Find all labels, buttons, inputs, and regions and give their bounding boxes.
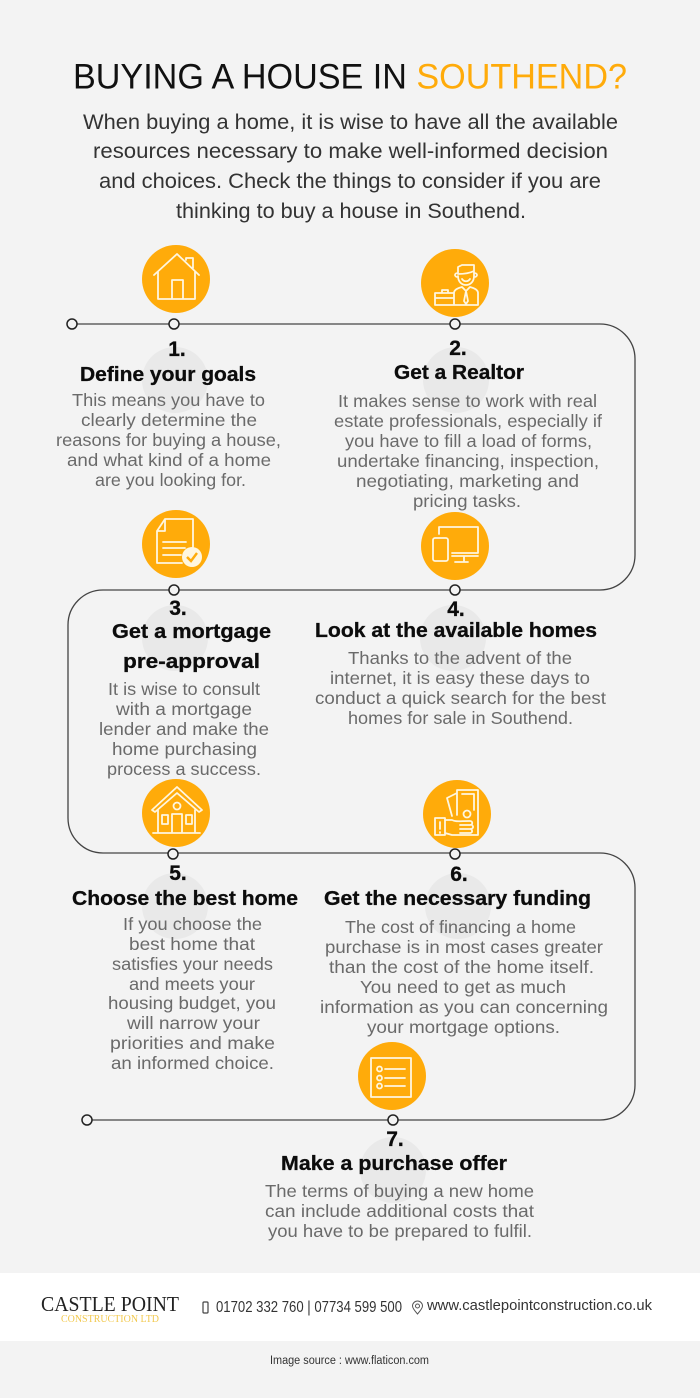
timeline end node bbox=[82, 1115, 92, 1125]
intro text: resources necessary to make well-informed decision bbox=[93, 139, 608, 163]
heading 3: pre-approval bbox=[123, 651, 260, 673]
intro text: thinking to buy a house in Southend. bbox=[176, 199, 526, 223]
body 4: homes for sale in Southend. bbox=[348, 708, 573, 728]
step 1 bbox=[56, 245, 281, 490]
company logo bbox=[41, 1292, 179, 1325]
body 7: The terms of buying a new home bbox=[265, 1181, 534, 1201]
number backdrop 2 bbox=[423, 347, 489, 413]
heading 3: Get a mortgage bbox=[112, 621, 271, 643]
number 1: 1. bbox=[168, 338, 186, 361]
number 3: 3. bbox=[169, 597, 187, 620]
node 1 bbox=[169, 319, 179, 329]
heading 1: Define your goals bbox=[80, 364, 256, 386]
step 6 bbox=[320, 780, 608, 1037]
step 4 bbox=[315, 512, 606, 728]
body 6: The cost of financing a home bbox=[345, 917, 576, 937]
icon: document with check bbox=[142, 510, 210, 578]
body 4 bbox=[315, 648, 606, 728]
icon: checklist bbox=[358, 1042, 426, 1110]
body 1: clearly determine the bbox=[81, 410, 257, 430]
number 7: 7. bbox=[386, 1128, 404, 1151]
body 3: process a success. bbox=[107, 759, 261, 779]
timeline start node bbox=[67, 319, 77, 329]
icon: realtor bbox=[421, 249, 489, 317]
icon: phone bbox=[203, 1302, 208, 1313]
body 7 bbox=[265, 1181, 534, 1241]
step 2 bbox=[334, 249, 602, 511]
body 2 bbox=[334, 391, 602, 511]
icon: devices bbox=[421, 512, 489, 580]
body 6: information as you can concerning bbox=[320, 997, 608, 1017]
icon: location pin bbox=[412, 1301, 422, 1314]
node 5 bbox=[168, 849, 178, 859]
body 5: If you choose the bbox=[123, 914, 262, 934]
body 2: pricing tasks. bbox=[413, 491, 521, 511]
body 6: your mortgage options. bbox=[367, 1017, 560, 1037]
body 1: are you looking for. bbox=[95, 470, 246, 490]
heading 7: Make a purchase offer bbox=[281, 1153, 507, 1175]
intro text bbox=[83, 110, 618, 223]
heading 6: Get the necessary funding bbox=[324, 888, 591, 910]
phone numbers: 01702 332 760 | 07734 599 500 bbox=[216, 1299, 402, 1316]
body 1: reasons for buying a house, bbox=[56, 430, 281, 450]
body 4: internet, it is easy these days to bbox=[330, 668, 590, 688]
body 4: conduct a quick search for the best bbox=[315, 688, 606, 708]
body 5 bbox=[108, 914, 276, 1073]
heading 4: Look at the available homes bbox=[315, 620, 597, 642]
number backdrop 3 bbox=[142, 605, 208, 671]
company logo: CASTLE POINT bbox=[41, 1292, 179, 1316]
icon: detailed house bbox=[142, 779, 210, 847]
step 5 bbox=[72, 779, 298, 1073]
intro text: and choices. Check the things to consider if you are bbox=[99, 169, 601, 193]
node 2 bbox=[450, 319, 460, 329]
body 7: you have to be prepared to fulfil. bbox=[268, 1221, 532, 1241]
intro text: When buying a home, it is wise to have all the available bbox=[83, 110, 618, 134]
body 3: with a mortgage bbox=[115, 699, 252, 719]
body 3: home purchasing bbox=[112, 739, 257, 759]
number 4: 4. bbox=[447, 598, 465, 621]
body 5: best home that bbox=[129, 934, 255, 954]
body 5: an informed choice. bbox=[111, 1053, 274, 1073]
body 6: You need to get as much bbox=[360, 977, 566, 997]
number 6: 6. bbox=[450, 863, 468, 886]
title: BUYING A HOUSE IN SOUTHEND? bbox=[73, 56, 627, 96]
heading 5: Choose the best home bbox=[72, 888, 298, 910]
body 5: and meets your bbox=[129, 974, 255, 994]
number backdrop 6 bbox=[425, 873, 491, 939]
body 6: purchase is in most cases greater bbox=[325, 937, 603, 957]
icon: money in hand bbox=[423, 780, 491, 848]
number backdrop 1 bbox=[142, 347, 208, 413]
body 3: It is wise to consult bbox=[108, 679, 260, 699]
body 7: can include additional costs that bbox=[265, 1201, 534, 1221]
node 6 bbox=[450, 849, 460, 859]
number 2: 2. bbox=[449, 337, 467, 360]
number 5: 5. bbox=[169, 862, 187, 885]
body 1 bbox=[56, 390, 281, 490]
number backdrop 7 bbox=[360, 1137, 426, 1203]
body 6 bbox=[320, 917, 608, 1037]
body 2: negotiating, marketing and bbox=[356, 471, 579, 491]
footer band bbox=[0, 1273, 700, 1341]
node 4 bbox=[450, 585, 460, 595]
body 5: satisfies your needs bbox=[112, 954, 273, 974]
image source credit: Image source : www.flaticon.com bbox=[270, 1355, 429, 1367]
body 6: than the cost of the home itself. bbox=[329, 957, 594, 977]
heading 3 bbox=[112, 621, 271, 673]
number backdrop 4 bbox=[420, 605, 486, 671]
body 1: and what kind of a home bbox=[67, 450, 271, 470]
body 3: lender and make the bbox=[99, 719, 269, 739]
body 2: undertake financing, inspection, bbox=[337, 451, 599, 471]
body 2: estate professionals, especially if bbox=[334, 411, 602, 431]
node 3 bbox=[169, 585, 179, 595]
number backdrop 5 bbox=[142, 873, 208, 939]
node 7 bbox=[388, 1115, 398, 1125]
body 2: you have to fill a load of forms, bbox=[345, 431, 592, 451]
body 5: priorities and make bbox=[110, 1033, 275, 1053]
timeline path bbox=[68, 324, 635, 1120]
body 5: housing budget, you bbox=[108, 993, 276, 1013]
body 5: will narrow your bbox=[126, 1013, 260, 1033]
body 2: It makes sense to work with real bbox=[338, 391, 597, 411]
icon: house bbox=[142, 245, 210, 313]
company logo: CONSTRUCTION LTD bbox=[61, 1314, 159, 1325]
body 3 bbox=[99, 679, 269, 779]
body 1: This means you have to bbox=[72, 390, 265, 410]
website: www.castlepointconstruction.co.uk bbox=[426, 1297, 652, 1314]
step 3 bbox=[99, 510, 271, 779]
body 4: Thanks to the advent of the bbox=[348, 648, 572, 668]
heading 2: Get a Realtor bbox=[394, 362, 524, 384]
step 7 bbox=[265, 1042, 534, 1241]
